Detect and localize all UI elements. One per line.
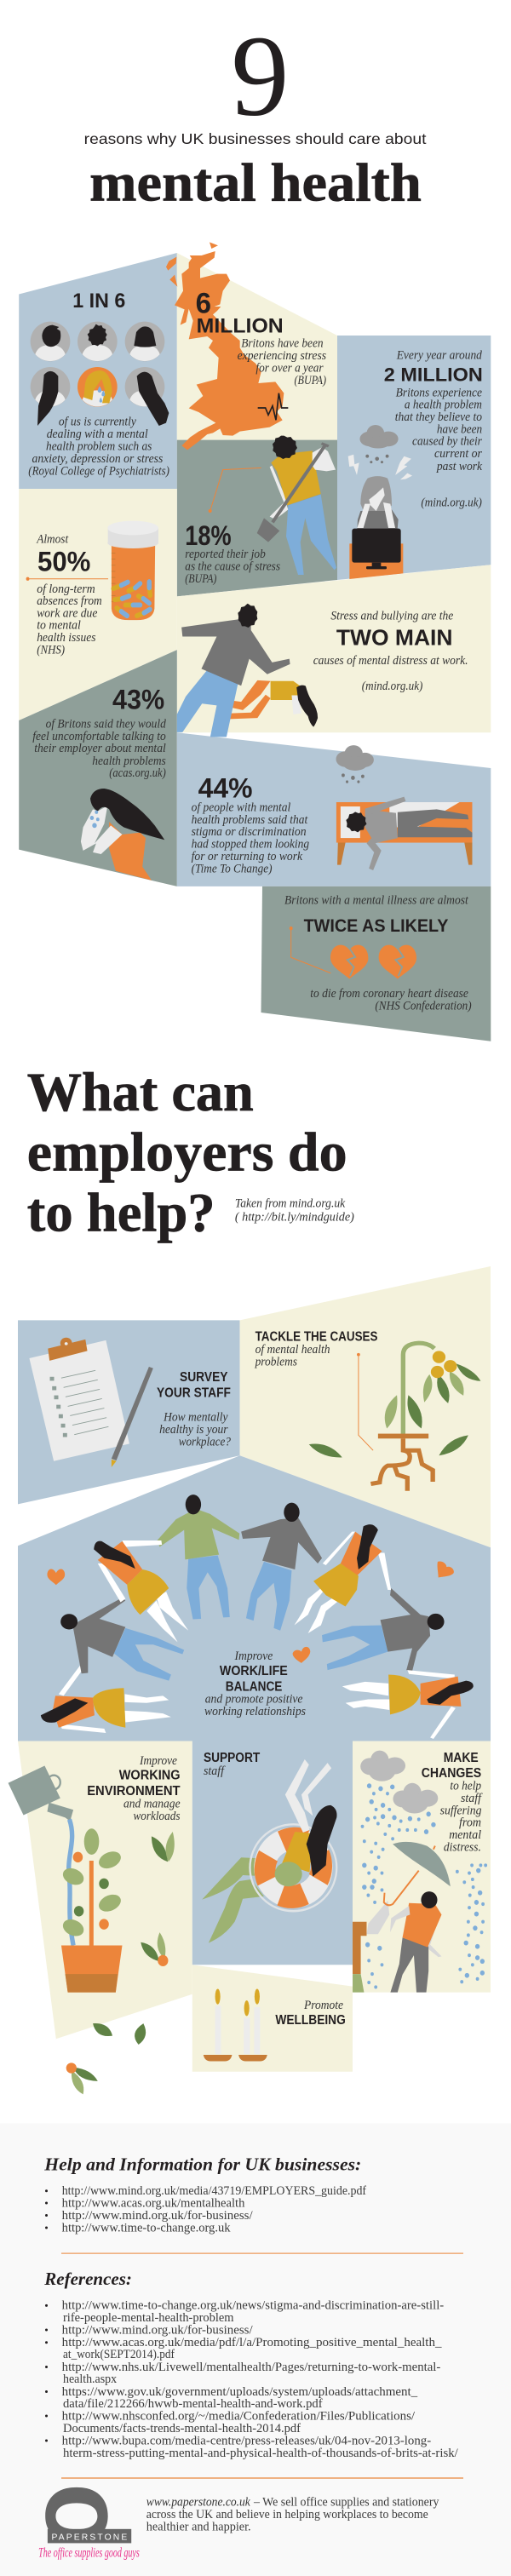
panel: 2 million text: that they believe to — [395, 410, 482, 424]
title numeral: 9 — [231, 13, 289, 141]
icon: heartbeat line on map — [258, 393, 288, 420]
panel: 1 in 6 text: 1 IN 6 — [72, 290, 125, 313]
panel: make changes text: mental — [449, 1828, 481, 1842]
list: references — [45, 2299, 459, 2460]
panel: 2 million text: Britons experience — [396, 386, 482, 399]
panel: 18 percent text: 18% — [185, 520, 232, 551]
panel: two main causes text: TWO MAIN — [336, 627, 453, 651]
icon: woman at computer — [349, 476, 403, 579]
icon: wilting plant with roots — [309, 1343, 480, 1491]
icon: woman in lifebuoy — [202, 1759, 337, 1943]
panel: 18 percent text — [185, 520, 280, 586]
panel: work life balance text: WORK/LIFE — [220, 1664, 288, 1678]
panel: twice as likely — [284, 894, 472, 1013]
icon: person lying on bed under cloud — [336, 745, 472, 870]
subtitle: reasons why UK businesses should care about — [84, 130, 427, 147]
list: references: http://www.time-to-change.org.uk/news/stigma-and-discrimination-are-still- — [62, 2299, 444, 2313]
panel: make changes text: CHANGES — [422, 1766, 481, 1781]
list: references: https://www.gov.uk/government/uploads/system/uploads/attachment_ — [62, 2385, 418, 2399]
panel: two main causes text: causes of mental distress at work. — [313, 654, 468, 668]
panel: survey text: YOUR STAFF — [157, 1386, 231, 1400]
person: woman lower left — [41, 1666, 171, 1733]
list: help links — [45, 2184, 366, 2235]
text: about paperstone: across the UK and believe in helping workplaces to become — [146, 2508, 428, 2521]
title main: mental health — [89, 152, 422, 212]
panel: 6 million text: Britons have been — [241, 337, 324, 351]
panel: 43 percent text: 43% — [112, 685, 164, 715]
panel: 2 million text: past work — [436, 460, 482, 473]
panel: background shapes, employers section — [18, 1266, 491, 2072]
map of the UK — [166, 242, 284, 450]
panel: working environment text: ENVIRONMENT — [87, 1784, 181, 1799]
panel: make changes text — [422, 1751, 483, 1855]
panel: support staff text — [204, 1751, 261, 1778]
heading: what can employers do: to help? — [27, 1182, 215, 1243]
list: references: http://www.bupa.com/media-centre/press-releases/uk/04-nov-2013-long- — [62, 2434, 431, 2447]
illustration: ring of people holding hands — [41, 1495, 474, 1739]
logo: paperstone: The office supplies good guys — [38, 2546, 140, 2561]
panel: twice as likely: Britons with a mental illness are almost — [284, 894, 469, 908]
panel: survey text — [157, 1370, 231, 1449]
panel: survey text: healthy is your — [159, 1423, 228, 1437]
panel: 1 in 6 text: anxiety, depression or stress — [32, 452, 163, 466]
panel: work life balance text: and promote positive — [205, 1692, 303, 1706]
panel: 43 percent text: their employer about mental — [34, 742, 166, 755]
panel: 1 in 6 text — [28, 290, 169, 479]
panel: two main causes text: Stress and bullying are the — [330, 610, 454, 623]
icon: watering can and potted plant — [9, 1765, 175, 2045]
panel: 44 percent text: had stopped them looking — [192, 838, 310, 852]
panel: two main causes text: (mind.org.uk) — [362, 680, 422, 693]
source note — [235, 1197, 354, 1225]
icon: storm cloud with lightning — [348, 425, 412, 479]
panel: 43 percent text: health problems — [92, 754, 166, 768]
panel: twice as likely: (NHS Confederation) — [375, 999, 472, 1013]
list: references: data/file/212266/hwwb-mental-health-and-work.pdf — [63, 2397, 323, 2411]
panel: tackle the causes text: of mental health — [256, 1343, 330, 1357]
panel: 6 million text — [196, 287, 326, 387]
panel: 2 million text: a health problem — [405, 399, 482, 412]
person: grey shirt right — [322, 1588, 445, 1671]
list: references: http://www.nhs.uk/Livewell/mentalhealth/Pages/returning-to-work-mental- — [62, 2361, 440, 2374]
text: about paperstone: www.paperstone.co.uk — [146, 2495, 250, 2509]
panel: 2 million text: caused by their — [412, 435, 482, 449]
list: help links: http://www.time-to-change.org.uk — [62, 2221, 231, 2235]
icon: clipboard and pencil — [29, 1338, 153, 1467]
panel: 6 million text: (BUPA) — [295, 374, 326, 387]
list: references: http://www.acas.org.uk/media/pdf/l/a/Promoting_positive_mental_health_ — [62, 2336, 442, 2349]
panel: promote wellbeing text — [275, 1999, 346, 2028]
panel: 6 million text: 6 — [196, 287, 211, 319]
panel: 18 percent text: as the cause of stress — [185, 560, 280, 574]
icon: crying woman — [81, 789, 164, 881]
logo: paperstone — [38, 2487, 140, 2561]
list: help links: http://www.mind.org.uk/for-business/ — [62, 2209, 254, 2223]
source note: Taken from mind.org.uk — [235, 1197, 346, 1211]
panel: working environment text: Improve — [139, 1754, 177, 1768]
panel: footer — [0, 2123, 511, 2576]
person: grey shirt left — [60, 1598, 184, 1681]
heading: what can employers do — [27, 1062, 347, 1243]
panel: 1 in 6 text: dealing with a mental — [47, 427, 148, 441]
panel: make changes text: from — [459, 1816, 481, 1830]
panel: 50 percent text: of long-term — [37, 582, 95, 596]
panel: 6 million text: MILLION — [197, 315, 284, 337]
panel: 1 in 6 text: (Royal College of Psychiatrists) — [28, 465, 169, 479]
panel: survey text: How mentally — [163, 1411, 228, 1425]
panel: 44 percent text: stigma or discrimination — [192, 825, 307, 839]
panel: 2 million text: current or — [434, 447, 482, 461]
panel: 18 percent text: (BUPA) — [185, 572, 216, 586]
panel: survey text: SURVEY — [180, 1370, 228, 1385]
panel: 2 million text: Every year around — [396, 349, 482, 363]
panel: twice as likely: to die from coronary heart disease — [310, 987, 468, 1001]
panel: 44 percent text: health problems said that — [192, 813, 308, 827]
person: woman lower right — [342, 1670, 474, 1739]
panel: 1 in 6 text: health problem such as — [46, 439, 152, 453]
panel: 50 percent text — [36, 533, 102, 657]
panel: background shapes, reasons section — [19, 253, 491, 1041]
panel: make changes text: to help — [450, 1780, 482, 1793]
panel: 50 percent text: absences from — [37, 594, 102, 608]
panel: survey text: workplace? — [179, 1436, 231, 1449]
panel: 50 percent text: Almost — [36, 533, 69, 547]
panel: 43 percent text — [32, 685, 166, 780]
list: help links: http://www.mind.org.uk/media/43719/EMPLOYERS_guide.pdf — [62, 2184, 366, 2198]
panel: 44 percent text — [192, 773, 310, 875]
person: woman upper left — [94, 1540, 188, 1642]
heading: what can employers do: What can — [27, 1062, 254, 1123]
list: references: at_work(SEPT2014).pdf — [63, 2348, 175, 2361]
panel: 6 million text: experiencing stress — [238, 349, 326, 363]
panel: work life balance text — [204, 1649, 306, 1718]
panel: support staff text: SUPPORT — [204, 1751, 261, 1765]
person: woman upper right — [295, 1524, 391, 1633]
panel: promote wellbeing text: WELLBEING — [275, 2013, 346, 2028]
panel: 44 percent text: 44% — [198, 773, 252, 804]
icon: man with umbrella in rain — [353, 1751, 487, 1993]
panel: work life balance text: BALANCE — [226, 1679, 282, 1694]
panel: 50 percent text: health issues — [37, 631, 96, 645]
panel: 1 in 6 text: of us is currently — [59, 416, 136, 429]
list: references: rife-people-mental-health-problem — [63, 2311, 234, 2325]
panel: tackle the causes text — [255, 1330, 378, 1369]
icon: candles — [204, 1988, 267, 2061]
panel: tackle the causes text: TACKLE THE CAUSES — [256, 1330, 378, 1345]
panel: make changes text: MAKE — [444, 1751, 479, 1765]
icon: broken hearts — [290, 927, 416, 979]
panel: 2 million text: have been — [437, 422, 482, 436]
panel: tackle the causes text: problems — [255, 1356, 297, 1369]
list: references: health.aspx — [63, 2372, 118, 2386]
person: grey shirt top right — [241, 1503, 322, 1631]
panel: 18 percent text: reported their job — [185, 548, 266, 561]
panel: 44 percent text: for or returning to work — [192, 850, 302, 863]
panel: make changes text: suffering — [440, 1804, 482, 1818]
text: about paperstone: – We sell office supplies and stationery — [253, 2495, 439, 2509]
panel: work life balance text: Improve — [234, 1649, 273, 1663]
panel: 2 million text: (mind.org.uk) — [421, 496, 482, 510]
source note: ( http://bit.ly/mindguide) — [235, 1211, 354, 1225]
panel: 50 percent text: work are due — [37, 606, 98, 620]
panel: make changes text: distress. — [444, 1841, 481, 1855]
list: references: http://www.mind.org.uk/for-business/ — [62, 2323, 254, 2337]
panel: 50 percent text: (NHS) — [37, 643, 65, 657]
heading: what can employers do: employers do — [27, 1122, 347, 1184]
panel: working environment text: workloads — [133, 1810, 181, 1823]
panel: work life balance text: working relationships — [204, 1705, 306, 1718]
panel: 43 percent text: feel uncomfortable talking to — [32, 730, 166, 743]
title — [84, 13, 427, 212]
panel: 44 percent text: of people with mental — [192, 800, 290, 814]
logo: paperstone: PAPERSTONE — [51, 2533, 127, 2543]
icon: running man and collapsed woman — [177, 604, 318, 737]
icon: six avatars — [31, 322, 169, 426]
panel: 43 percent text: of Britons said they would — [46, 717, 166, 731]
panel: make changes text: staff — [461, 1792, 483, 1805]
panel: promote wellbeing text: Promote — [303, 1999, 343, 2012]
panel: 2 million text — [384, 349, 483, 510]
person: green shirt — [157, 1495, 239, 1619]
list: help links: http://www.acas.org.uk/mentalhealth — [62, 2196, 245, 2210]
icon: pill bottle — [26, 521, 158, 620]
icon: hearts — [47, 1561, 454, 1663]
icon: man digging with shovel — [209, 436, 336, 575]
panel: working environment text — [87, 1754, 181, 1823]
panel: two main causes text — [313, 610, 468, 693]
list: references: Documents/facts-trends-mental-health-2014.pdf — [63, 2422, 301, 2435]
panel: 6 million text: for over a year — [256, 361, 324, 375]
panel: working environment text: and manage — [123, 1797, 181, 1810]
panel: 44 percent text: (Time To Change) — [192, 862, 273, 875]
panel: 50 percent text: to mental — [37, 619, 81, 633]
list: references: hterm-stress-putting-mental-and-physical-health-of-thousands-of-brits-at-risk/ — [63, 2447, 459, 2460]
text: about paperstone — [146, 2495, 439, 2533]
panel: 43 percent text: (acas.org.uk) — [109, 766, 166, 780]
panel: twice as likely: TWICE AS LIKELY — [304, 916, 448, 936]
panel: 50 percent text: 50% — [37, 547, 90, 577]
heading: help and information: Help and Information for UK businesses: — [43, 2154, 361, 2175]
panel: working environment text: WORKING — [119, 1769, 181, 1783]
panel: support staff text: staff — [204, 1764, 226, 1778]
panel: 2 million text: 2 MILLION — [384, 364, 483, 386]
icon: fallen leaves — [66, 2063, 98, 2094]
list: references: http://www.nhsconfed.org/~/media/Confederation/Files/Publications/ — [62, 2409, 416, 2423]
text: about paperstone: healthier and happier. — [146, 2520, 251, 2533]
heading: references: References: — [43, 2269, 132, 2289]
